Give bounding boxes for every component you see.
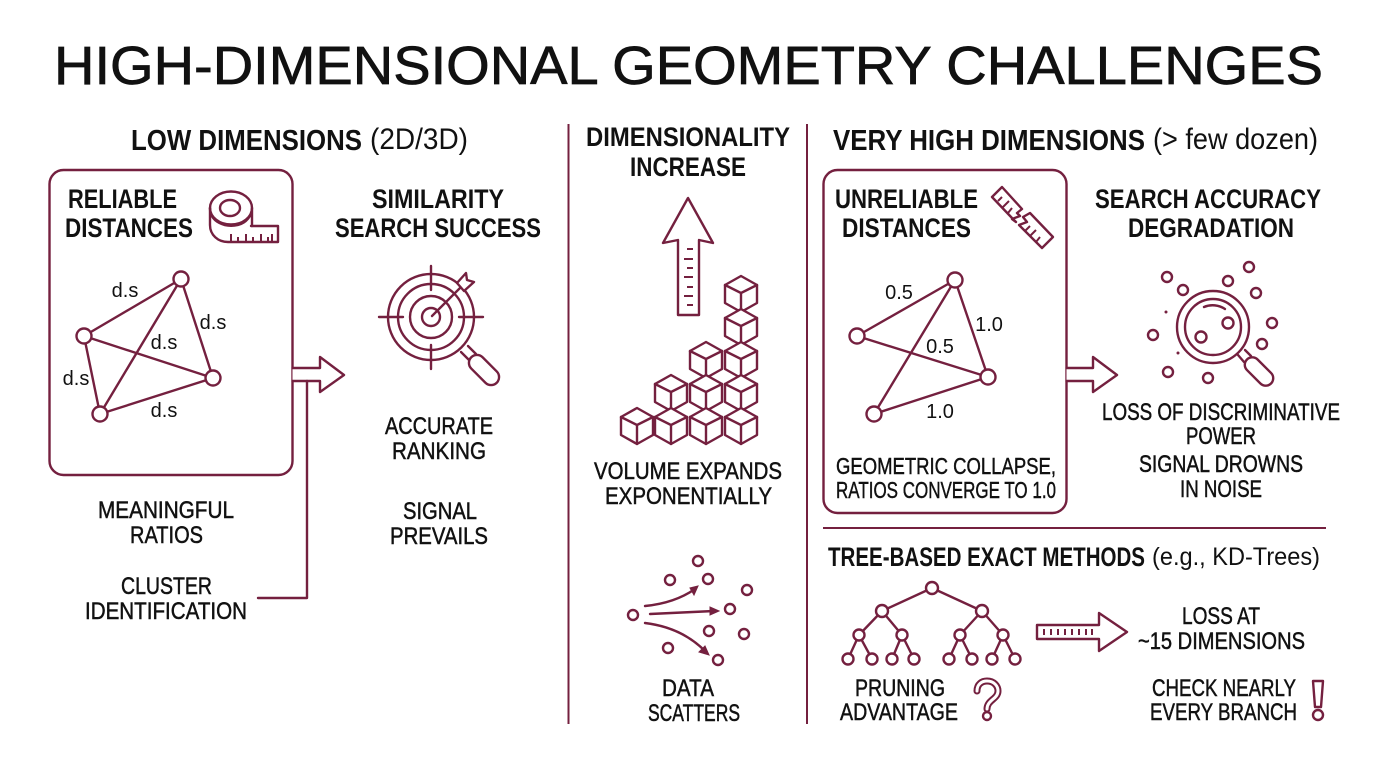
- card heading: unreliable distances: [835, 184, 978, 243]
- heading: search accuracy degradation: SEARCH ACCURACY: [1095, 184, 1321, 214]
- diagram: consistent distance graph: d.s: [200, 312, 226, 334]
- text: volume expands exponentially: VOLUME EXPANDS: [594, 458, 782, 485]
- text: pruning advantage: [840, 675, 958, 726]
- text: signal prevails: [390, 498, 488, 550]
- arrow: unreliable distances to degradation: [1066, 357, 1117, 392]
- text: accurate ranking: RANKING: [392, 438, 486, 465]
- text: loss at 15 dimensions: [1138, 603, 1305, 655]
- heading: very high dimensions: (> few dozen): [1153, 123, 1318, 156]
- horizontal divider: [823, 527, 1326, 529]
- text: loss of discriminative power: [1102, 399, 1340, 450]
- arrow: ruler arrow right: [1037, 613, 1127, 651]
- arrow: reliable distances to search success: [292, 357, 344, 392]
- heading: tree-based exact methods: (e.g., KD-Trees): [1152, 543, 1320, 571]
- text: loss at 15 dimensions: ~15 DIMENSIONS: [1138, 628, 1305, 655]
- icon: exclamation mark: [1313, 681, 1323, 720]
- diagram: consistent distance graph: d.s: [63, 368, 89, 390]
- diagram: collapsed distance graph: 1.0: [926, 401, 954, 423]
- text: volume expands exponentially: EXPONENTIALLY: [605, 483, 772, 510]
- diagram: binary tree: [842, 582, 1020, 664]
- heading: similarity search success: SIMILARITY: [372, 184, 504, 214]
- text: signal prevails: SIGNAL: [403, 498, 477, 525]
- text: volume expands exponentially: [594, 458, 782, 510]
- text: signal drowns in noise: [1139, 451, 1303, 503]
- heading: tree-based exact methods: TREE-BASED EXACT METHODS: [828, 542, 1145, 572]
- heading: similarity search success: SEARCH SUCCESS: [335, 213, 541, 243]
- heading: search accuracy degradation: DEGRADATION: [1128, 213, 1294, 243]
- text: signal drowns in noise: SIGNAL DROWNS: [1139, 451, 1303, 478]
- heading: search accuracy degradation: [1095, 184, 1321, 243]
- text: cluster identification: IDENTIFICATION: [85, 598, 247, 625]
- diagram: collapsed distance graph: 1.0: [975, 314, 1003, 336]
- heading: very high dimensions: [833, 123, 1318, 157]
- text: data scatters: [648, 675, 740, 727]
- card heading: unreliable distances: UNRELIABLE: [835, 184, 978, 214]
- heading: dimensionality increase: INCREASE: [630, 152, 746, 182]
- vertical divider right: [806, 124, 808, 724]
- heading: very high dimensions: VERY HIGH DIMENSIONS: [833, 125, 1145, 157]
- text: check nearly every branch: CHECK NEARLY: [1152, 675, 1296, 702]
- text: loss at 15 dimensions: LOSS AT: [1182, 603, 1260, 630]
- text: cluster identification: CLUSTER: [121, 573, 212, 600]
- text: data scatters: SCATTERS: [648, 700, 740, 727]
- card: unreliable distances: [824, 170, 1066, 513]
- text: geometric collapse: RATIOS CONVERGE TO 1.0: [836, 477, 1056, 503]
- diagram: consistent distance graph: d.s: [112, 280, 138, 302]
- heading: low dimensions: LOW DIMENSIONS: [131, 125, 362, 157]
- card heading: reliable distances: RELIABLE: [68, 184, 177, 214]
- text: accurate ranking: [385, 413, 493, 465]
- text: cluster identification: [85, 573, 247, 625]
- text: data scatters: DATA: [662, 675, 714, 702]
- diagram: consistent distance graph: [63, 272, 226, 422]
- diagram: consistent distance graph: d.s: [151, 400, 177, 422]
- panel: dimensionality increase: [586, 122, 790, 727]
- text: meaningful ratios: [98, 497, 234, 549]
- text: geometric collapse: [836, 453, 1056, 503]
- text: check nearly every branch: EVERY BRANCH: [1150, 699, 1297, 726]
- vertical divider left: [568, 124, 570, 724]
- title: HIGH-DIMENSIONAL GEOMETRY CHALLENGES: [54, 36, 1323, 96]
- text: meaningful ratios: RATIOS: [130, 522, 203, 549]
- icon: question mark: [977, 681, 998, 720]
- text: signal prevails: PREVAILS: [390, 523, 488, 550]
- icon: scattering data points: [628, 556, 752, 665]
- text: meaningful ratios: MEANINGFUL: [98, 497, 234, 524]
- text: accurate ranking: ACCURATE: [385, 413, 493, 440]
- panel: very high dimensions: [824, 123, 1340, 513]
- icon: stacked cubes: [621, 276, 757, 444]
- icon: magnifier in noise: [1148, 262, 1277, 389]
- text: geometric collapse: GEOMETRIC COLLAPSE,: [836, 453, 1056, 479]
- card heading: reliable distances: [65, 184, 193, 243]
- heading: low dimensions: (2D/3D): [370, 123, 468, 156]
- text: loss of discriminative power: POWER: [1186, 423, 1256, 450]
- diagram: collapsed distance graph: 0.5: [926, 336, 954, 358]
- heading: similarity search success: [335, 184, 541, 243]
- text: signal drowns in noise: IN NOISE: [1180, 476, 1262, 503]
- card heading: reliable distances: DISTANCES: [65, 213, 193, 243]
- text: pruning advantage: PRUNING: [855, 675, 945, 702]
- icon: target with magnifier: [379, 266, 502, 388]
- card heading: unreliable distances: DISTANCES: [842, 213, 971, 243]
- heading: dimensionality increase: [586, 122, 790, 182]
- text: check nearly every branch: [1150, 675, 1297, 726]
- diagram: collapsed distance graph: [850, 272, 1003, 423]
- icon: measuring tape: [210, 192, 278, 242]
- diagram: collapsed distance graph: 0.5: [885, 282, 913, 304]
- icon: upward ruler arrow: [663, 198, 713, 315]
- connector: cluster identification to arrow: [258, 381, 307, 598]
- panel: low dimensions: [50, 123, 541, 625]
- icon: broken ruler: [992, 187, 1053, 248]
- diagram: consistent distance graph: d.s: [151, 332, 177, 354]
- card: reliable distances: [50, 170, 292, 475]
- heading: dimensionality increase: DIMENSIONALITY: [586, 122, 790, 152]
- panel: tree-based exact methods: [828, 542, 1323, 726]
- text: pruning advantage: ADVANTAGE: [840, 699, 958, 726]
